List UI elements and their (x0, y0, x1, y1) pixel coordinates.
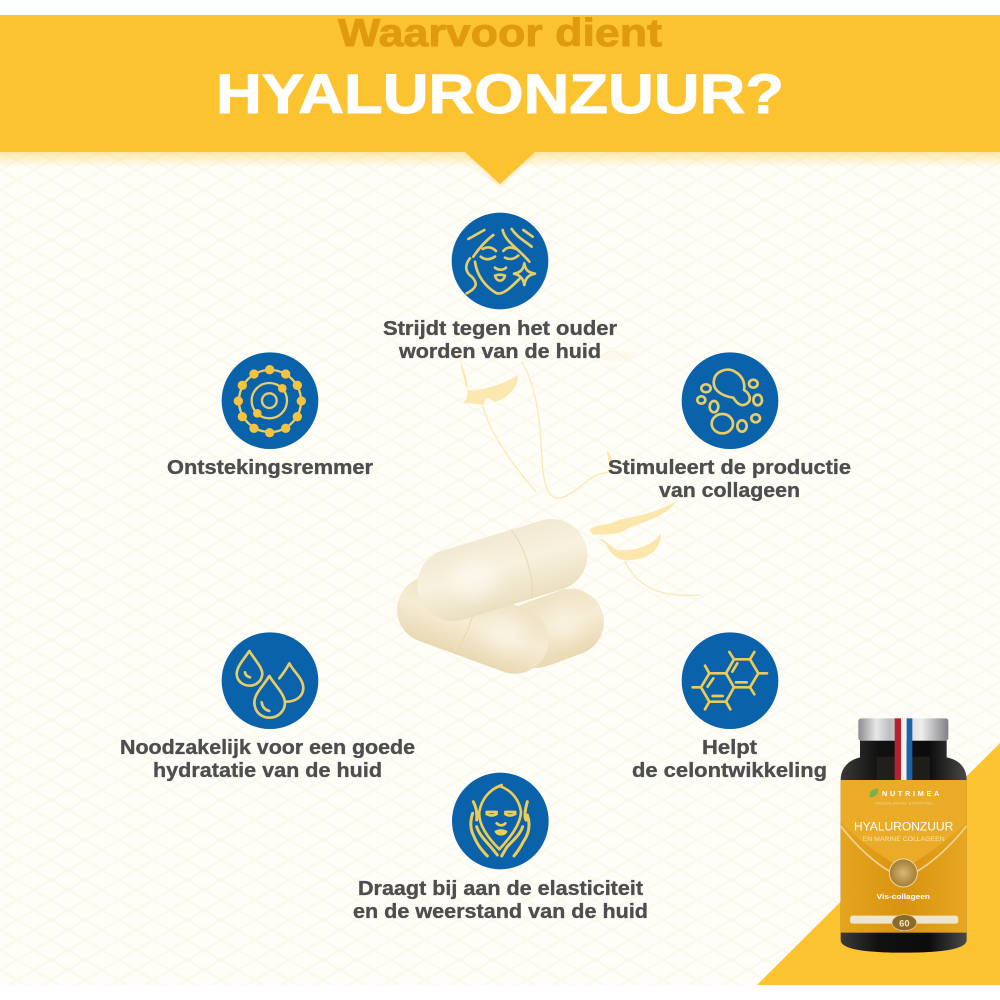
heading: HYALURONZUUR?: HYALURONZUUR? (216, 62, 784, 125)
capsule count strip: 60 (899, 919, 910, 929)
icon: molecule (682, 632, 778, 729)
label: anti-ageing: Strijdt tegen het ouder (383, 318, 617, 340)
brand: NEDERLANDSE EXPERTISE (875, 801, 933, 805)
label: collagen production (608, 457, 851, 502)
bottle body (841, 741, 967, 953)
label: anti-ageing: worden van de huid (398, 341, 601, 363)
product name (854, 820, 954, 843)
icon: face between hands (452, 773, 549, 869)
corner triangle (757, 743, 1000, 985)
label: collagen production: van collageen (659, 480, 800, 502)
capsule count strip (850, 915, 958, 931)
heading: Waarvoor dient: Waarvoor dient (338, 12, 662, 55)
label: cell development: de celontwikkeling (632, 760, 827, 782)
header banner (0, 12, 1000, 184)
medallion (889, 859, 917, 887)
product bottle: Vis-collageen (877, 892, 931, 901)
bottle cap (858, 718, 948, 741)
label: elasticity: Draagt bij aan de elasticiteit (358, 878, 643, 900)
icon: water drops (222, 632, 318, 729)
capsules (388, 510, 613, 683)
label: hydration (120, 737, 415, 782)
face line drawing (460, 351, 700, 595)
capsule: top (408, 510, 596, 630)
icon: collagen cells (682, 352, 778, 449)
label: anti-inflammatory: Ontstekingsremmer (167, 457, 373, 479)
product name: EN MARINE COLLAGEEN (863, 836, 945, 843)
label: hydration: Noodzakelijk voor een goede (120, 737, 415, 759)
brand: NUTRIMEA (882, 789, 940, 798)
label: elasticity (353, 878, 648, 923)
product bottle (841, 718, 967, 953)
label background (841, 780, 967, 933)
brand (869, 789, 940, 805)
label: cell development (632, 737, 827, 782)
label: collagen production: Stimuleert de productie (608, 457, 851, 479)
capsule: back right (493, 579, 613, 677)
label: elasticity: en de weerstand van de huid (353, 901, 648, 923)
banner pointer (465, 152, 535, 184)
tricolour ribbon (895, 718, 912, 780)
product name: HYALURONZUUR (854, 820, 954, 834)
icon: face with sparkle (452, 213, 548, 309)
icon: cell with molecules (222, 352, 318, 449)
label: anti-ageing (383, 318, 617, 363)
label: cell development: Helpt (702, 737, 757, 759)
label: hydration: hydratatie van de huid (153, 760, 382, 782)
capsule: front lower (388, 567, 558, 683)
